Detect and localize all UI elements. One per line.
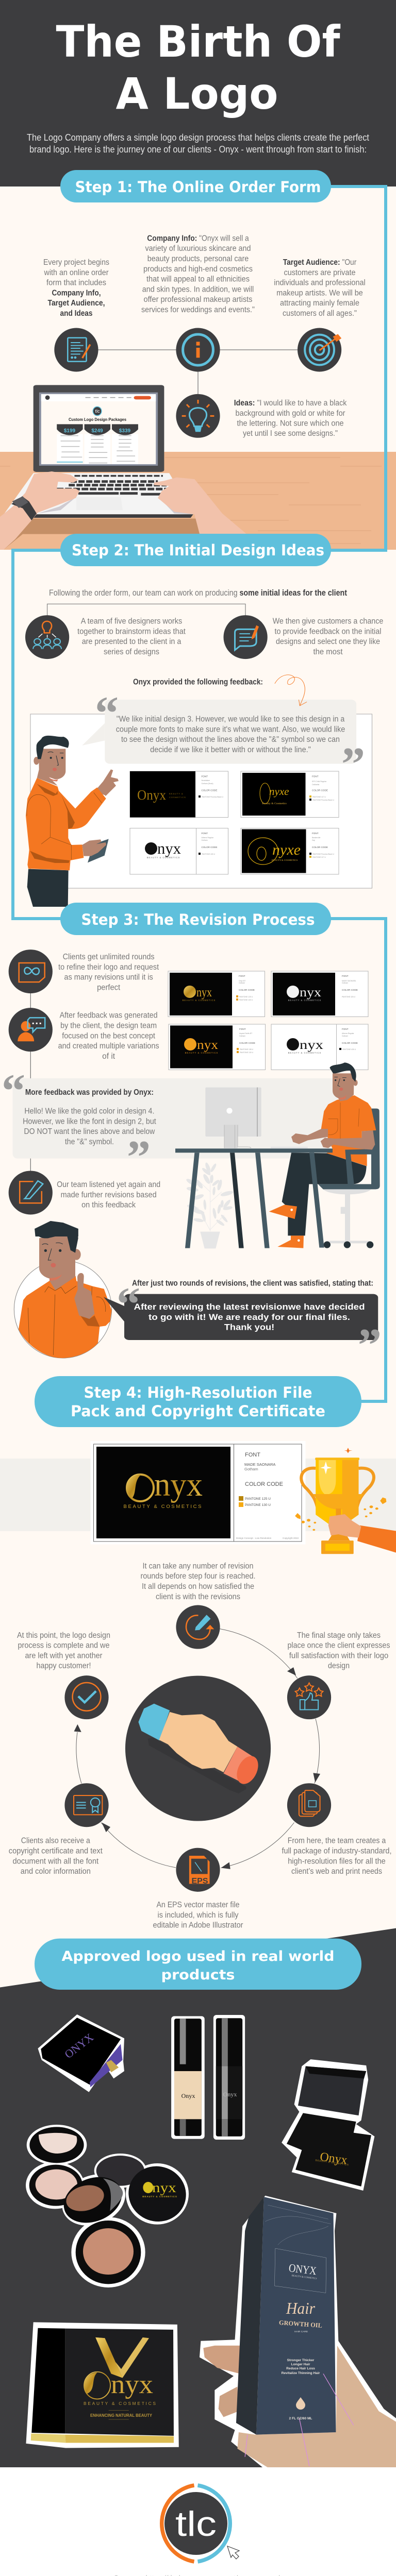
screen prices: $199 bbox=[64, 428, 76, 434]
revision design card 3: Gotham bbox=[239, 1035, 245, 1037]
revision design card 3: nyx bbox=[197, 1038, 219, 1052]
product: gift box: ONYX bbox=[62, 2030, 96, 2061]
step 1 heading bbox=[60, 170, 331, 202]
light band behind final design bbox=[0, 1459, 396, 1531]
team text bbox=[77, 617, 186, 656]
text: happy customer: happy customer! bbox=[36, 1662, 91, 1670]
text: high-resolution files bbox=[282, 1836, 392, 1876]
cycle icon: copyright certificate bbox=[64, 1783, 109, 1827]
text: revision rounds: client is with the revisions bbox=[156, 1592, 240, 1601]
initial design card 4: nyxe bbox=[272, 841, 301, 858]
revision design card 1 bbox=[168, 971, 265, 1017]
product: bottles: Onyx bbox=[182, 2092, 195, 2099]
product: compacts bbox=[26, 2125, 194, 2287]
step 2 intro text: Following the order form, our team can work on producing some initial ideas for the client bbox=[49, 588, 347, 598]
initial design card 2: Beauty & Cosmetics bbox=[262, 802, 287, 805]
cycle icon: complete check bbox=[64, 1675, 109, 1719]
text: copyright certificate: copyright certificate and text bbox=[9, 1846, 103, 1856]
final design certificate card: COLOR CODE bbox=[245, 1481, 283, 1487]
revision design card 2: COLOR CODE bbox=[342, 989, 358, 991]
revision design card 2: FONT bbox=[342, 975, 349, 977]
initial design card 1: COSMETICS bbox=[169, 796, 186, 799]
product: hair growth oil box held in hand: Revitalize Thinning Hair bbox=[282, 2371, 320, 2375]
product: hair growth oil box held in hand: BEAUTY & COSMETICS bbox=[292, 2274, 317, 2280]
icon: ideas light bulb bbox=[176, 394, 220, 438]
further revisions text: Our team listened yet again and bbox=[57, 1180, 160, 1189]
initial design card 2: FONT bbox=[312, 775, 319, 778]
icon: team brainstorm bbox=[25, 615, 69, 659]
text: copyright certificate bbox=[9, 1836, 103, 1876]
revision design card 3: FONT bbox=[239, 1028, 246, 1030]
white design card panel bbox=[30, 714, 372, 888]
connector line: step 1 to step 2 bbox=[330, 187, 386, 550]
step 1 intro text: form that includes bbox=[46, 278, 106, 287]
initial design card 3: Athena Regular bbox=[201, 837, 214, 839]
company info text: that will appeal to all ethnicities bbox=[146, 275, 250, 283]
ideas quote text bbox=[234, 399, 347, 438]
final design certificate card: nyx bbox=[154, 1466, 203, 1503]
screen prices: $249 bbox=[91, 428, 103, 434]
revision design card 2: MADE SAONARA bbox=[342, 980, 356, 982]
target audience text: individuals and professional bbox=[274, 278, 366, 287]
text: copyright certificate: and color information bbox=[21, 1867, 91, 1876]
icon: client feedback bbox=[9, 1008, 53, 1052]
revisions text: as many revisions until it is bbox=[64, 973, 153, 982]
central handshake illustration bbox=[125, 1676, 271, 1821]
initial design card 4: Baskerville bbox=[312, 837, 321, 839]
revisions text bbox=[58, 953, 159, 992]
revision design card 3 bbox=[169, 1024, 265, 1070]
initial design card 2: nyxe bbox=[269, 785, 289, 798]
initial design card 3: nyx bbox=[157, 839, 181, 857]
text: final stage: design bbox=[328, 1662, 350, 1670]
product: compacts: nyx bbox=[152, 2180, 176, 2195]
team text: are presented to the client in a bbox=[82, 637, 182, 646]
initial design card 2: PANTONE 117 U bbox=[312, 796, 326, 798]
final design certificate card: PANTONE 130 U bbox=[245, 1503, 271, 1507]
screen heading: Custom Logo Design Packages bbox=[69, 417, 126, 422]
text: high-resolution files: From here, the team creates a bbox=[288, 1836, 386, 1845]
step 3 heading bbox=[60, 903, 331, 935]
revision design card 1: FONT bbox=[239, 975, 245, 977]
revision design card 4: Gotham bbox=[342, 1035, 348, 1037]
speech bubble: feedback quote bbox=[82, 700, 356, 764]
logo: tlc bbox=[162, 2485, 239, 2562]
initial design card 3: PANTONE 426 U bbox=[202, 853, 216, 855]
illustration: man with thumbs up in circle bbox=[14, 1231, 112, 1358]
speech bubble: feedback quote: couple more fonts to make sure it's what we want. Also, we would like bbox=[116, 725, 345, 734]
text: happy customer: At this point, the logo design bbox=[17, 1631, 110, 1640]
cycle icon: EPS file bbox=[176, 1848, 220, 1892]
panel: more feedback from Onyx: More feedback was provided by Onyx: bbox=[25, 1088, 154, 1097]
product: shopping bag: BEAUTY & COSMETICS bbox=[84, 2401, 156, 2406]
further revisions text: made further revisions based bbox=[61, 1191, 157, 1199]
revisions text: perfect bbox=[97, 983, 121, 992]
initial design card 1: PANTONE Process Black U bbox=[202, 796, 223, 798]
approved logo heading bbox=[35, 1939, 361, 1990]
product: shopping bag bbox=[26, 2322, 179, 2448]
title: The Birth Of bbox=[56, 16, 341, 67]
feedback text: designs and select one they like bbox=[276, 637, 380, 646]
final design certificate card: FONT bbox=[245, 1452, 260, 1458]
icon: cursor bbox=[227, 2546, 239, 2559]
ideas quote text: the lettering. Not sure which one bbox=[237, 419, 343, 428]
initial design card 2: Calibartia bbox=[312, 784, 319, 786]
text: high-resolution files: high-resolution files for all the bbox=[288, 1857, 386, 1866]
final design certificate card: Gotham bbox=[244, 1467, 258, 1471]
text: revision rounds: rounds before step four is reached. bbox=[140, 1572, 256, 1581]
logo: tlc: tlc bbox=[175, 2504, 217, 2544]
initial design card 4: Zap bbox=[312, 839, 315, 841]
revision design card 4: COLOR CODE bbox=[342, 1042, 358, 1044]
company info text bbox=[141, 234, 255, 314]
initial design card 3: FONT bbox=[201, 832, 208, 835]
target audience text: customers of all ages." bbox=[283, 309, 357, 318]
company info text: variety of luxurious skincare and bbox=[145, 244, 251, 253]
approved logo heading: Approved logo used in real world bbox=[62, 1948, 334, 1964]
connector line: step 3 to step 4 bbox=[330, 919, 386, 1401]
step 4 heading bbox=[35, 1376, 361, 1427]
speech bubble: client approval: After reviewing the latest revisionwe have decided bbox=[134, 1302, 365, 1312]
text: high-resolution files: full package of industry-standard, bbox=[282, 1846, 392, 1856]
connector line: step 2 to step 3 bbox=[13, 550, 62, 919]
target audience text: attracting mainly female bbox=[280, 299, 359, 308]
design team text: After feedback was generated bbox=[60, 1011, 158, 1020]
design team text: of it bbox=[102, 1052, 116, 1061]
opening quote mark: “ bbox=[95, 687, 119, 739]
cycle icon: high-resolution files bbox=[287, 1783, 331, 1827]
initial design card 1: FONT bbox=[201, 775, 208, 778]
initial design card 1: Gotham (Book) bbox=[201, 783, 213, 785]
company info text: services for weddings and events." bbox=[141, 306, 255, 314]
icon: feedback chat bbox=[223, 615, 268, 659]
initial design card 3: COLOR CODE bbox=[201, 846, 217, 849]
company info text: products and high-end cosmetics bbox=[143, 265, 253, 274]
footer white band bbox=[0, 2467, 396, 2576]
speech bubble: feedback quote: "We like initial design 3. However, we would like to see this design in a bbox=[117, 715, 345, 723]
revision design card 3: PANTONE 130 U bbox=[240, 1052, 254, 1054]
product: compacts: BEAUTY & COSMETICS bbox=[142, 2195, 177, 2198]
text: happy customer: process is complete and we bbox=[18, 1641, 109, 1650]
speech bubble: feedback quote: to see the design without the lines above the "&" symbol so we can bbox=[121, 735, 340, 744]
further revisions text bbox=[57, 1180, 160, 1210]
product: hair growth oil box held in hand: Stronger Thicker bbox=[287, 2359, 315, 2362]
final design certificate card bbox=[91, 1441, 305, 1545]
panel: more feedback from Onyx: However, we like the font in design 2, but bbox=[23, 1117, 156, 1126]
step 1 intro text: with an online order bbox=[44, 268, 108, 277]
step 1 intro text: Company Info, bbox=[52, 289, 101, 297]
final design certificate card: Copyright 2022 bbox=[283, 1537, 299, 1539]
illustration: man pointing bbox=[26, 736, 119, 907]
speech bubble: client approval: Thank you! bbox=[224, 1323, 274, 1332]
product: hair growth oil box held in hand bbox=[200, 2196, 396, 2467]
closing quote mark: ” bbox=[341, 738, 365, 790]
text: high-resolution files: client’s web and print needs bbox=[291, 1867, 382, 1876]
step 1 intro text: and Ideas bbox=[60, 309, 93, 318]
opening quote mark: “ bbox=[117, 1278, 140, 1330]
initial design card 4: PANTONE 117 U bbox=[312, 856, 326, 858]
initial design card 2 bbox=[241, 771, 339, 817]
text: EPS master file: editable in Adobe Illustrator bbox=[153, 1921, 243, 1930]
target audience text: customers are private bbox=[284, 268, 356, 277]
initial design card 3: Gotham bbox=[201, 839, 208, 841]
arrow: curly orange bbox=[275, 675, 307, 706]
title bbox=[56, 16, 341, 119]
initial design card 1: Neutraface bbox=[201, 779, 210, 782]
initial design card 3: BEAUTY & COSMETICS bbox=[147, 856, 180, 859]
header: dark band with title and intro bbox=[0, 0, 396, 187]
text: revision rounds: It can take any number of revision bbox=[142, 1562, 254, 1570]
product: hair growth oil box held in hand: HAIR CARE bbox=[294, 2330, 308, 2333]
step 2 heading bbox=[60, 534, 331, 566]
ideas quote text: background with gold or white for bbox=[235, 409, 345, 418]
product: hair growth oil box held in hand: GROWTH OIL bbox=[279, 2319, 322, 2329]
laptop shape and hands bbox=[0, 385, 246, 550]
text: revision rounds bbox=[140, 1562, 256, 1601]
cycle icon: star rating thumbs up bbox=[287, 1675, 331, 1719]
team text: series of designs bbox=[104, 648, 159, 656]
revision design card 4: FONT bbox=[342, 1028, 349, 1030]
initial design card 4 bbox=[241, 828, 339, 874]
screen logo: tlc bbox=[95, 409, 100, 414]
product: hair growth oil box held in hand: Hair bbox=[286, 2299, 316, 2317]
product: shopping bag: nyx bbox=[111, 2370, 153, 2399]
revision design card 4: nyx bbox=[300, 1038, 324, 1052]
panel: more feedback from Onyx: the "&" symbol. bbox=[65, 1138, 114, 1146]
speech bubble: client approval bbox=[104, 1294, 378, 1340]
product: hair growth oil box held in hand: Reduce Hair Loss bbox=[286, 2367, 315, 2370]
target audience text: makeup artists. We will be bbox=[276, 289, 363, 297]
product: mailer box: BEAUTY & COSMETICS bbox=[315, 2159, 349, 2166]
product: hair growth oil box held in hand: Longer Hair bbox=[291, 2363, 310, 2366]
screen prices: $339 bbox=[119, 428, 131, 434]
step 4 heading: Pack and Copyright Certificate bbox=[71, 1402, 325, 1420]
text: happy customer bbox=[17, 1631, 110, 1670]
closing quote mark: ” bbox=[358, 1319, 382, 1371]
team text: A team of five designers works bbox=[81, 617, 182, 626]
icon: info bbox=[176, 328, 220, 371]
title: A Logo bbox=[116, 69, 278, 119]
closing quote mark: ” bbox=[127, 1131, 151, 1183]
design team text bbox=[58, 1011, 159, 1061]
revision design card 3: Aspect Serifs BT bbox=[239, 1032, 252, 1035]
product: gift box bbox=[38, 2014, 124, 2092]
initial design card 1: BEAUTY & bbox=[169, 792, 184, 795]
panel: more feedback from Onyx bbox=[12, 1078, 345, 1159]
revision design card 4: Athena Regular bbox=[342, 1032, 354, 1035]
speech bubble: client approval: to go with it! We are ready for our final files. bbox=[148, 1313, 350, 1322]
feedback text: We then give customers a chance bbox=[273, 617, 383, 626]
revision design card 4 bbox=[271, 1024, 368, 1070]
text: EPS master file bbox=[153, 1901, 243, 1930]
revision design card 2: PANTONE 426 U bbox=[342, 996, 356, 998]
revision design card 2: Gotham bbox=[342, 982, 348, 984]
revision design card 3: PANTONE 138 U bbox=[240, 1048, 254, 1050]
screen prices bbox=[64, 428, 131, 434]
feedback text: to provide feedback on the initial bbox=[274, 627, 382, 636]
final design certificate card: PANTONE 125 U bbox=[245, 1497, 271, 1501]
text: final stage: The final stage only takes bbox=[297, 1631, 381, 1640]
initial design card 4: COLOR CODE bbox=[312, 846, 328, 849]
revision design card 1: COLOR CODE bbox=[239, 989, 255, 991]
initial design card 4: FONT bbox=[312, 832, 319, 835]
product: hair growth oil box held in hand: ONYX bbox=[288, 2261, 317, 2277]
company info text: offer professional makeup artists bbox=[143, 295, 253, 304]
step 1 intro text: Every project begins bbox=[43, 258, 109, 267]
illustration: trophy held in hand bbox=[295, 1448, 396, 1554]
revision design card 1: PANTONE 125 U bbox=[239, 996, 253, 998]
company info text: Company Info: "Onyx will sell a bbox=[147, 234, 249, 243]
final design certificate card: Design Concept - Low Resolution bbox=[236, 1537, 272, 1539]
initial design card 2: COLOR CODE bbox=[312, 789, 328, 791]
final design certificate card: BEAUTY & COSMETICS bbox=[124, 1504, 201, 1510]
Onyx feedback label: Onyx provided the following feedback: bbox=[133, 678, 263, 686]
target audience text: Target Audience: "Our bbox=[283, 258, 356, 267]
revision design card 4: BEAUTY & COSMETICS bbox=[288, 1052, 321, 1054]
step 4 heading: Step 4: High-Resolution File bbox=[84, 1384, 312, 1401]
revision design card 4: PANTONE 426 U bbox=[342, 1048, 356, 1050]
initial design card 2: PANTONE Process Black U bbox=[312, 799, 334, 801]
text: final stage bbox=[288, 1631, 390, 1670]
cycle icon: EPS file: EPS bbox=[191, 1877, 208, 1886]
product: bottles bbox=[171, 2015, 245, 2140]
revision design card 2: BEAUTY & COSMETICS bbox=[288, 999, 321, 1002]
initial design card 1: Onyx bbox=[137, 787, 166, 803]
step 1 intro text bbox=[43, 258, 109, 318]
text: final stage: place once the client expresses bbox=[288, 1641, 390, 1650]
initial design card 4: BEAUTY & COSMETICS bbox=[272, 859, 298, 861]
hair of thumbs up man bbox=[35, 1221, 78, 1236]
approved logo heading: products bbox=[161, 1967, 235, 1983]
revision design card 3: BEAUTY & COSMETICS bbox=[185, 1052, 218, 1054]
text: revision rounds: It all depends on how satisfied the bbox=[142, 1582, 254, 1591]
team text: together to brainstorm ideas that bbox=[77, 627, 186, 636]
product: hair growth oil box held in hand: 2 FL OZ/60 ML bbox=[289, 2417, 312, 2420]
text: final stage: full satisfaction with their logo bbox=[289, 1651, 388, 1660]
revisions text: Clients get unlimited rounds bbox=[63, 953, 155, 961]
revision design card 1: Gotham bbox=[239, 982, 245, 984]
speech bubble: feedback quote: decide if we like it better with or without the line." bbox=[150, 745, 311, 754]
feedback text bbox=[273, 617, 383, 656]
connector lines between step 1 icons bbox=[98, 350, 298, 394]
icon: order form document bbox=[54, 328, 98, 371]
laptop with order page on screen bbox=[0, 385, 246, 550]
initial design card 1 bbox=[130, 771, 228, 817]
product: mailer box bbox=[282, 2059, 374, 2191]
text: EPS master file: An EPS vector master file bbox=[157, 1901, 239, 1909]
cycle icon: revision pencil bbox=[176, 1605, 220, 1649]
text: copyright certificate: Clients also receive a bbox=[21, 1836, 90, 1845]
target audience text bbox=[274, 258, 366, 318]
step 1 intro text: Target Audience, bbox=[47, 299, 105, 308]
icon: further revisions pencil bbox=[9, 1171, 53, 1214]
illustration: man at desk with computer bbox=[175, 1062, 380, 1248]
company info text: beauty products, personal care bbox=[147, 255, 249, 263]
further revisions text: on this feedback bbox=[81, 1201, 136, 1210]
revision design card 1: BEAUTY & COSMETICS bbox=[183, 999, 216, 1002]
revision design card 1: nyx bbox=[196, 986, 212, 999]
label: client satisfied: After just two rounds of revisions, the client was satisfied, stating that: bbox=[132, 1279, 373, 1288]
cycle arrowheads bbox=[74, 1667, 320, 1869]
product: mailer box: Onyx bbox=[319, 2150, 348, 2167]
step 3 timeline line bbox=[30, 989, 31, 1175]
final design certificate card: MADE SAONARA bbox=[244, 1462, 275, 1467]
design team text: and created multiple variations bbox=[58, 1042, 159, 1050]
revision design card 2 bbox=[271, 971, 368, 1017]
opening quote mark: “ bbox=[2, 1064, 25, 1117]
text: happy customer: are left with yet another bbox=[25, 1651, 102, 1660]
step 2 heading: Step 2: The Initial Design Ideas bbox=[72, 541, 324, 559]
company info text: and skin types. In addition, we will bbox=[142, 285, 254, 294]
feedback text: the most bbox=[314, 648, 343, 656]
icon: unlimited revisions bbox=[9, 950, 53, 993]
product: bottles: Onyx bbox=[223, 2091, 237, 2098]
revision design card 2: nyx bbox=[300, 986, 322, 999]
dark products background bbox=[0, 1928, 396, 2467]
icon: target audience bbox=[298, 328, 341, 371]
revision design card 1: PANTONE 130 U bbox=[239, 999, 253, 1001]
intro text bbox=[27, 132, 369, 155]
design team text: focused on the best concept bbox=[62, 1031, 156, 1040]
initial design card 4: PANTONE Process Black U bbox=[312, 853, 334, 855]
revision design card 1: Onyx BT bbox=[239, 980, 245, 982]
ideas quote text: yet until I see some designs." bbox=[243, 429, 338, 438]
text: EPS master file: is included, which is fully bbox=[158, 1911, 239, 1920]
panel: more feedback from Onyx: Hello! We like the gold color in design 4. bbox=[24, 1107, 154, 1116]
product: shopping bag: ENHANCING NATURAL BEAUTY bbox=[90, 2413, 153, 2418]
connector between step 2 icons bbox=[47, 604, 245, 616]
initial design card 3 bbox=[130, 828, 228, 874]
revision design card 3: COLOR CODE bbox=[239, 1042, 255, 1044]
cycle arcs bbox=[76, 1629, 320, 1868]
step 1 heading: Step 1: The Online Order Form bbox=[75, 178, 321, 196]
initial design card 1: COLOR CODE bbox=[201, 789, 217, 791]
ideas quote text: Ideas: "I would like to have a black bbox=[234, 399, 347, 408]
text: copyright certificate: document with all the font bbox=[12, 1857, 99, 1866]
initial design card 2: SFS Child Regular bbox=[312, 781, 327, 783]
wood desk background bbox=[0, 452, 396, 550]
panel: more feedback from Onyx: DO NOT want the lines above and below bbox=[24, 1127, 155, 1136]
revisions text: to refine their logo and request bbox=[58, 963, 159, 972]
design team text: by the client, the design team bbox=[60, 1021, 157, 1030]
step 3 heading: Step 3: The Revision Process bbox=[81, 911, 315, 928]
